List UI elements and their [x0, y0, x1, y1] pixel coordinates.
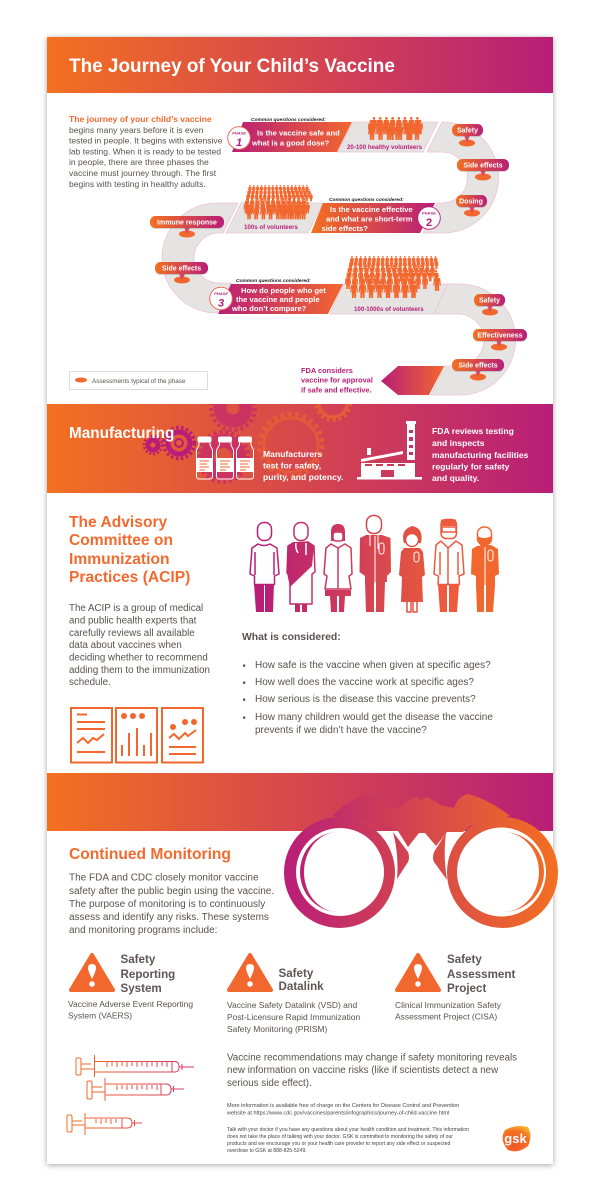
- ACIP heading: [69, 514, 190, 586]
- ACIP body: carefully reviews all available: [69, 628, 195, 639]
- monitoring body: and monitoring programs include:: [69, 925, 217, 936]
- phase 3: PHASE: [214, 291, 228, 296]
- assessment pills: [150, 124, 527, 380]
- icon: alert: [229, 955, 271, 990]
- pill: safety 1: [452, 124, 483, 146]
- bullet list: [243, 660, 493, 736]
- FDA approval arrow: [301, 366, 444, 395]
- ACIP body: adding them to the immunization: [69, 665, 210, 676]
- FDA review text: [432, 426, 529, 483]
- monitoring body: The FDA and CDC closely monitor vaccine: [69, 872, 259, 884]
- manufacturers text: purity, and potency.: [263, 472, 343, 482]
- program: safety assessment project: Safety: [447, 953, 482, 966]
- phase 2: [311, 197, 440, 233]
- monitoring body: safety after the public begin using the vaccine.: [69, 886, 274, 897]
- FDA review text: FDA reviews testing: [432, 426, 514, 436]
- program: safety reporting system: Safety: [120, 953, 156, 966]
- icon: alert: [71, 955, 113, 990]
- factory icon: [357, 421, 422, 480]
- program: safety datalink: [227, 955, 360, 1034]
- fine print: disclaimer: [227, 1127, 469, 1154]
- program: safety reporting system: System (VAERS): [68, 1010, 132, 1020]
- fine print: disclaimer: products and we encourage you or your health care provider to report any side effect or suspected: [227, 1141, 451, 1147]
- pill: safety 3: Safety: [479, 298, 500, 304]
- manufacturers text: [263, 449, 343, 482]
- pill: side effects 3: [452, 359, 504, 380]
- person 2: [287, 522, 315, 612]
- fine print: disclaimer: Talk with your doctor if you have any questions about your health condition and treatment. This information: [227, 1127, 469, 1133]
- pill: side effects 2: Side effects: [162, 266, 201, 272]
- pill: side effects 1: Side effects: [463, 162, 503, 170]
- phase 3: How do people who get: [241, 286, 326, 295]
- icon: alert: [397, 955, 439, 990]
- ACIP body: data about vaccines when: [69, 640, 182, 651]
- phase 3: Common questions considered:: [236, 278, 311, 284]
- GSK logo: [503, 1126, 530, 1151]
- phase 1: PHASE: [232, 130, 246, 136]
- fine print: disclaimer: overdose to GSK at 888-825-5249.: [227, 1148, 307, 1154]
- manufacturers text: test for safety,: [263, 460, 321, 470]
- recommendations text: new information on vaccine risks (like if scientists detect a new: [227, 1065, 499, 1076]
- intro text: begins with testing in healthy adults.: [69, 179, 206, 189]
- program: safety assessment project: Project: [447, 982, 486, 995]
- program: safety assessment project: Assessment: [447, 968, 515, 981]
- person 4: [360, 516, 391, 612]
- FDA review text: regularly for safety: [432, 462, 510, 472]
- manufacturing band: [47, 404, 553, 493]
- program: safety assessment project: Assessment Project (CISA): [395, 1012, 497, 1022]
- ACIP body: schedule.: [69, 677, 111, 688]
- ACIP body: and public health experts that: [69, 616, 197, 626]
- phase 2: 2: [426, 217, 432, 229]
- program: safety datalink: Post-Licensure Rapid Immunization: [227, 1012, 360, 1022]
- phase 1: Common questions considered:: [251, 117, 326, 123]
- phase 2: Is the vaccine effective: [330, 205, 413, 214]
- phase 2: Common questions considered:: [329, 197, 404, 203]
- journey road: [162, 122, 516, 395]
- phase 2: and what are short-term: [326, 214, 413, 224]
- FDA text: FDA considers: [301, 366, 353, 375]
- icon: syringes: [67, 1055, 194, 1135]
- pill: safety 1: Safety: [457, 128, 478, 134]
- label: 20-100 healthy volunteers: [347, 144, 423, 151]
- phase 2: side effects?: [322, 224, 368, 233]
- crowd: 20-100 healthy volunteers: [347, 117, 423, 151]
- program: safety assessment project: Clinical Immunization Safety: [395, 1000, 502, 1010]
- recommendations text: serious side effect).: [227, 1078, 312, 1089]
- person 7: [471, 527, 499, 612]
- pill: side effects 2: [155, 262, 208, 284]
- fine print: more information: More information is available free of charge on the Centers for Disease Control and Prevention: [227, 1103, 459, 1109]
- phase 3: [210, 278, 343, 314]
- monitoring band: [47, 773, 553, 831]
- phase 1: what is a good dose?: [251, 138, 330, 148]
- continued monitoring heading: Continued Monitoring: [69, 846, 231, 863]
- ACIP body: deciding whether to recommend: [69, 652, 208, 664]
- monitoring body: assess and identify any risks. These systems: [69, 912, 269, 923]
- FDA review text: and quality.: [432, 473, 479, 483]
- crowd: 100-1000s of volunteers: [345, 256, 441, 313]
- person 3: [324, 524, 352, 612]
- ACIP heading: Immunization: [69, 551, 170, 568]
- intro text: tested in people. It begins with extensive: [69, 136, 223, 146]
- intro text: begins many years before it is even: [69, 125, 204, 135]
- fine print: disclaimer: does not take the place of talking with your doctor. GSK is committed to monitoring the safety of our: [227, 1134, 453, 1140]
- what is considered: What is considered:: [242, 632, 341, 643]
- program: safety datalink: Safety: [278, 967, 314, 980]
- pill: side effects 3: Side effects: [458, 362, 498, 370]
- person 5: [399, 526, 425, 612]
- pill: effectiveness: [473, 329, 527, 350]
- ACIP heading: Practices (ACIP): [69, 569, 190, 586]
- pill: dosing: [456, 195, 487, 216]
- phase 3: 3: [218, 298, 224, 310]
- intro text: [69, 114, 223, 189]
- ACIP body: The ACIP is a group of medical: [69, 603, 203, 614]
- FDA review text: and inspects: [432, 438, 485, 448]
- ACIP heading: The Advisory: [69, 514, 168, 531]
- gears: [142, 404, 352, 484]
- bullet list: How many children would get the disease the vaccine: [255, 712, 493, 723]
- header band: [47, 37, 553, 93]
- what is considered: [242, 632, 493, 736]
- phase 1: [228, 117, 352, 152]
- bullet list: How safe is the vaccine when given at specific ages?: [255, 660, 491, 671]
- program: safety datalink: Safety Monitoring (PRISM): [227, 1024, 328, 1034]
- intro text: in people, there are three phases the: [69, 157, 209, 167]
- crowd: 100s of volunteers: [243, 185, 313, 231]
- person 6: [434, 520, 464, 612]
- bullet list: prevents if we didn’t have the vaccine?: [255, 725, 427, 736]
- pill: dosing: Dosing: [459, 198, 483, 206]
- program: safety datalink: Datalink: [278, 980, 324, 993]
- icon: binoculars: [284, 794, 558, 928]
- manufacturers text: Manufacturers: [263, 449, 322, 459]
- fine print: more information: [226, 1103, 459, 1116]
- recommendations text: [227, 1052, 517, 1089]
- phase 3: who don’t compare?: [231, 304, 307, 313]
- program: safety reporting system: Reporting: [120, 968, 175, 981]
- phase 2: PHASE: [422, 210, 436, 216]
- phase 1: Is the vaccine safe and: [257, 128, 340, 138]
- pill: side effects 1: [457, 159, 509, 180]
- ACIP heading: Committee on: [69, 532, 173, 549]
- FDA text: [301, 366, 373, 394]
- intro text: The journey of your child’s vaccine: [69, 114, 212, 124]
- program: safety assessment project: [395, 953, 515, 1022]
- phase 3: the vaccine and people: [236, 295, 320, 304]
- label: 100s of volunteers: [244, 224, 299, 231]
- label: 100-1000s of volunteers: [354, 306, 424, 313]
- bullet list: How well does the vaccine work at specific ages?: [255, 677, 474, 688]
- program: safety datalink: Vaccine Safety Datalink (VSD) and: [227, 1000, 358, 1010]
- FDA text: vaccine for approval: [301, 376, 373, 384]
- pill: effectiveness: Effectiveness: [477, 332, 523, 340]
- pill: immune response: Immune response: [157, 220, 217, 226]
- ACIP body: [69, 603, 210, 688]
- recommendations text: Vaccine recommendations may change if safety monitoring reveals: [227, 1052, 517, 1064]
- pill: safety 3: [474, 294, 505, 316]
- phase 1: 1: [236, 137, 242, 149]
- pill: immune response: [150, 216, 224, 238]
- bullet list: How serious is the disease this vaccine prevents?: [255, 694, 476, 705]
- program: safety reporting system: Vaccine Adverse Event Reporting: [68, 999, 193, 1009]
- GSK logo: gsk: [504, 1131, 527, 1146]
- legend: [70, 372, 208, 390]
- title: The Journey of Your Child’s Vaccine: [69, 56, 395, 77]
- program: safety reporting system: [68, 953, 193, 1020]
- monitoring body: [69, 872, 274, 936]
- page card: [47, 37, 553, 1165]
- program: safety reporting system: System: [120, 982, 162, 995]
- FDA text: if safe and effective.: [301, 386, 372, 394]
- FDA review text: manufacturing facilities: [432, 450, 529, 460]
- intro text: lab testing. When it is ready to be tested: [69, 146, 221, 156]
- person 1: [250, 522, 279, 612]
- section title: Manufacturing: [69, 425, 174, 442]
- monitoring body: The purpose of monitoring is to continuously: [69, 899, 265, 910]
- fine print: more information: website at https://www.cdc.gov/vaccines/parents/infographics/journey-of-child-vaccine.html: [226, 1110, 449, 1116]
- vials: [196, 437, 254, 479]
- icon: data panels: [71, 708, 203, 762]
- legend: Assessments typical of the phase: [92, 378, 186, 385]
- icon: medical professionals: [250, 516, 499, 612]
- intro text: vaccine must journey through. The first: [69, 168, 217, 178]
